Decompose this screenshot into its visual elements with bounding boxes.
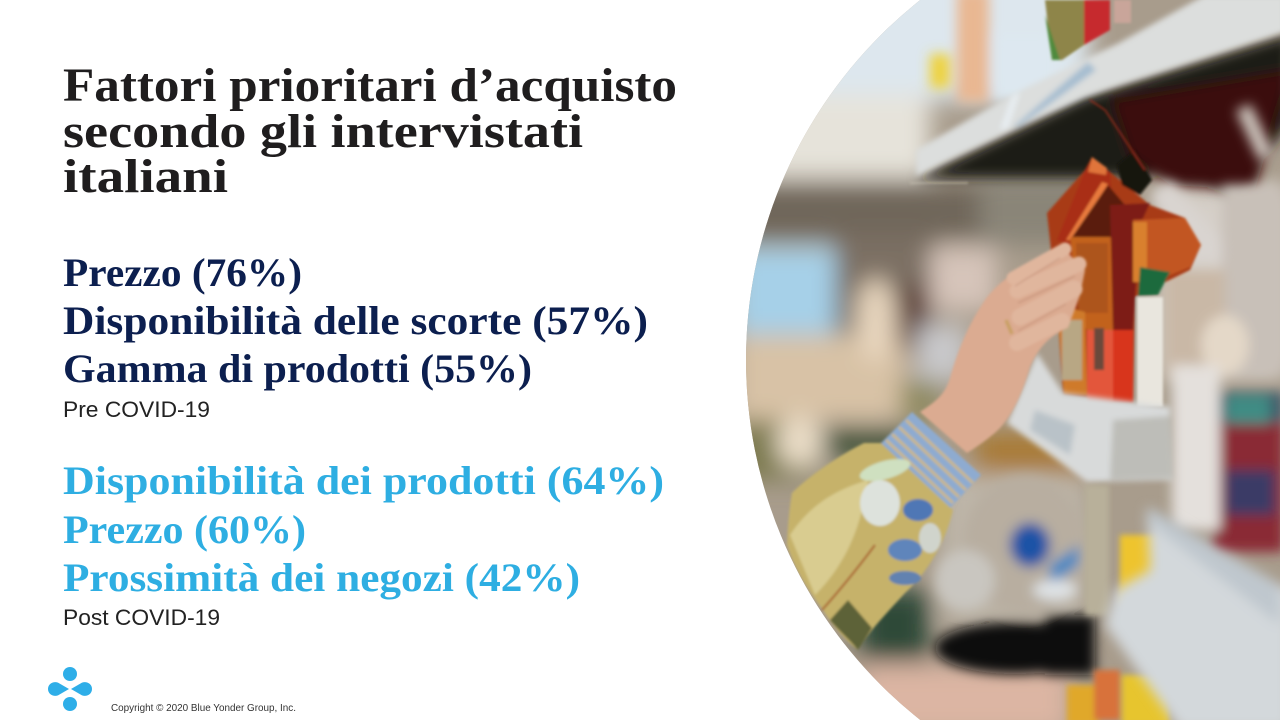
- text block: pre COVID-19 purchase factors: [63, 250, 648, 422]
- dark underside of upper shelf: [916, 35, 1280, 195]
- icon: Blue Yonder logo: [48, 667, 92, 711]
- text block: post COVID-19 purchase factors: Post COVID-19: [63, 605, 220, 630]
- hand and arm of the shopper: [787, 245, 1085, 650]
- text block: pre COVID-19 purchase factors: Gamma di prodotti (55%): [63, 346, 532, 391]
- striped cuff: [881, 412, 981, 508]
- text block: post COVID-19 purchase factors: [63, 458, 664, 630]
- text block: pre COVID-19 purchase factors: Pre COVID-19: [63, 397, 210, 422]
- floral sleeve: [787, 443, 953, 650]
- white blurred goods on the right: [1150, 104, 1280, 552]
- text block: pre COVID-19 purchase factors: Disponibilità delle scorte (57%): [63, 298, 648, 343]
- title: Fattori prioritari d’acquisto: [63, 59, 677, 112]
- hand: [920, 245, 1085, 453]
- text block: post COVID-19 purchase factors: Prezzo (60%): [63, 507, 306, 552]
- photo: hand reaching for a product on a supermarket shelf: [730, 0, 1280, 720]
- orange product package: [1047, 100, 1201, 407]
- title: [63, 59, 677, 203]
- text block: pre COVID-19 purchase factors: Prezzo (76%): [63, 250, 302, 295]
- title: secondo gli intervistati: [63, 105, 583, 158]
- copyright: Copyright © 2020 Blue Yonder Group, Inc.: [111, 703, 296, 714]
- bottle and blurred items below the shelf: [935, 475, 1095, 675]
- yellow packages and price rail bottom right: [1067, 485, 1170, 720]
- text block: post COVID-19 purchase factors: Disponibilità dei prodotti (64%): [63, 458, 664, 503]
- upper shelf products: [930, 0, 1052, 102]
- title: italiani: [63, 150, 228, 203]
- text block: post COVID-19 purchase factors: Prossimità dei negozi (42%): [63, 555, 580, 600]
- blurred background: store wall and lower aisle: [730, 0, 1280, 720]
- upper shelf edge: [916, 0, 1280, 176]
- lower shelf edge: [1007, 353, 1173, 482]
